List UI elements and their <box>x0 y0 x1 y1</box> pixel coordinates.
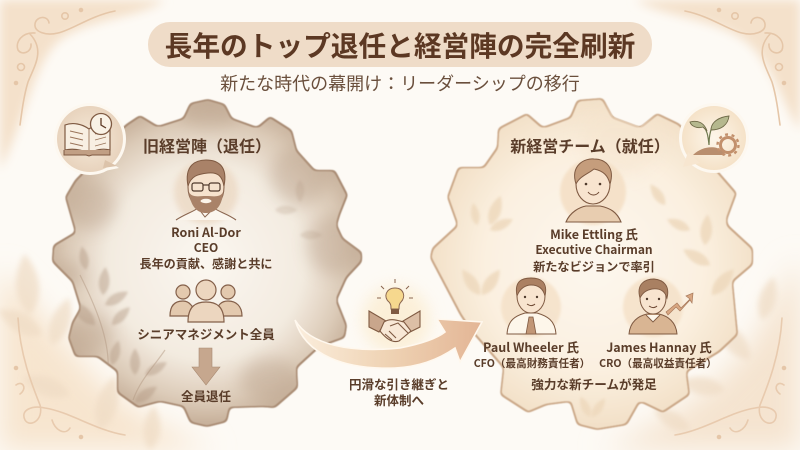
text: Paul Wheeler details: Paul Wheeler 氏 <box>483 337 579 356</box>
text: Mike Ettling details <box>533 224 655 275</box>
portrait: James Hannay <box>623 277 693 337</box>
title banner: 長年のトップ退任と経営陣の完全刷新 <box>165 24 635 64</box>
text: Paul Wheeler details: CFO（最高財務責任者） <box>474 356 590 371</box>
icon: sprout and gear bubble <box>679 103 749 173</box>
text: smooth handover: 新体制へ <box>374 390 424 409</box>
text: Mike Ettling details: 新たなビジョンで率引 <box>533 257 655 275</box>
text: Mike Ettling details: Mike Ettling 氏 <box>550 224 638 243</box>
text: strong new team: 強力な新チームが発足 <box>531 374 657 393</box>
text: Mike Ettling details: Executive Chairman <box>535 241 653 258</box>
portrait: Mike Ettling <box>560 159 626 225</box>
text: smooth handover <box>349 374 449 409</box>
arrow: down <box>192 348 220 385</box>
heading: incoming: 新経営チーム（就任） <box>510 133 670 157</box>
watercolor leaves left gear <box>78 247 167 402</box>
icon: lightbulb <box>362 279 430 354</box>
text: James Hannay details <box>599 337 717 371</box>
arrow: transition <box>295 319 482 368</box>
text: Paul Wheeler details <box>474 337 590 371</box>
portrait: Roni Al-Dor <box>174 160 238 224</box>
decorative foliage bottom-right <box>650 275 782 437</box>
heading: outgoing: 旧経営陣（退任） <box>143 133 271 157</box>
text: Roni Al-Dor details <box>139 222 273 272</box>
text: Roni Al-Dor details: Roni Al-Dor <box>171 222 241 241</box>
text: senior management: シニアマネジメント全員 <box>137 324 275 343</box>
text: James Hannay details: CRO（最高収益責任者） <box>599 356 717 371</box>
text: Roni Al-Dor details: CEO <box>194 239 218 256</box>
subtitle: 新たな時代の幕開け：リーダーシップの移行 <box>220 70 580 96</box>
icon: handshake <box>369 311 420 342</box>
icon: growth arrow <box>666 293 693 315</box>
panel: outgoing management gear <box>45 99 363 427</box>
decorative foliage bottom-left <box>0 253 162 450</box>
text: Roni Al-Dor details: 長年の貢献、感謝と共に <box>139 255 273 272</box>
text: smooth handover: 円滑な引き継ぎと <box>349 374 449 393</box>
text: James Hannay details: James Hannay 氏 <box>606 337 712 356</box>
text: all retire: 全員退任 <box>181 386 231 405</box>
portrait: Paul Wheeler <box>501 277 561 337</box>
icon: senior management group <box>170 280 242 322</box>
panel: incoming team gear <box>430 98 753 430</box>
icon: book and clock bubble <box>54 103 126 175</box>
watercolor leaves right gear <box>458 182 738 419</box>
